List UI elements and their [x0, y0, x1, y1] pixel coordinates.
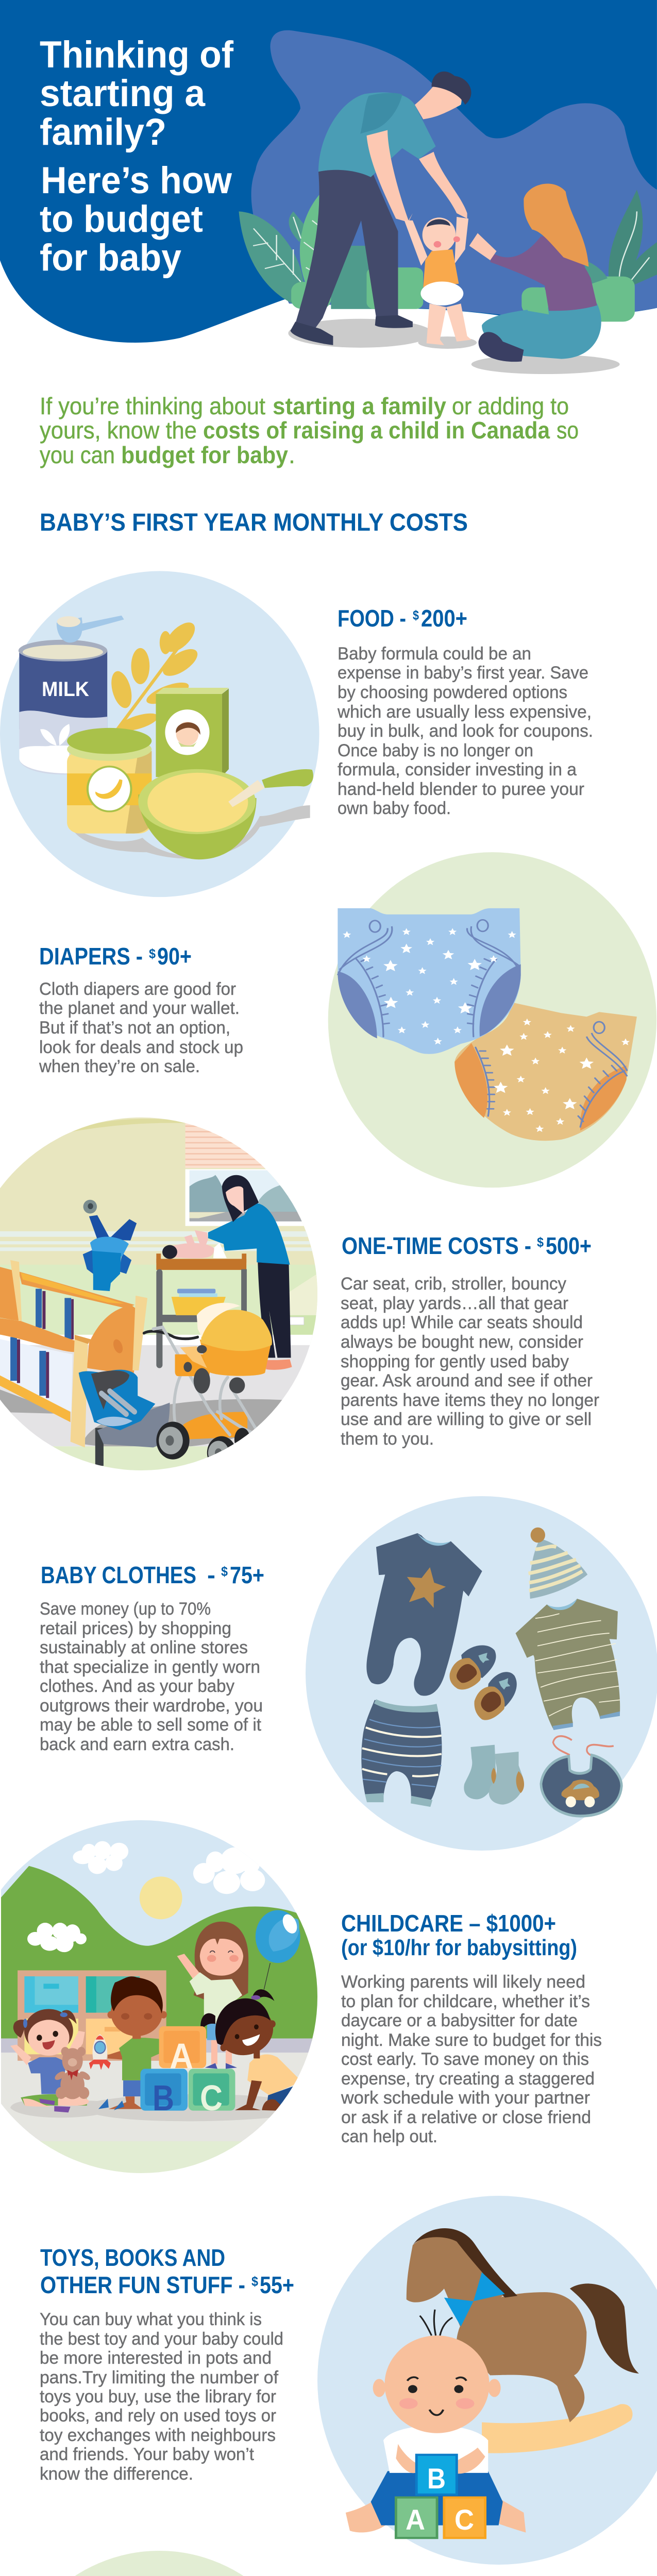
section heading: BABY’S FIRST YEAR MONTHLY COSTS — [40, 509, 468, 536]
blue header shape — [0, 0, 657, 343]
body: food — [337, 644, 593, 818]
intro text: starting a family — [273, 393, 446, 419]
body: one-time costs: them to you. — [341, 1429, 434, 1449]
body: baby clothes: retail prices) by shopping — [40, 1619, 231, 1638]
hero title: starting a — [40, 73, 206, 114]
panel: food illustration — [0, 571, 319, 897]
body: toys: and friends. Your baby won’t — [40, 2445, 255, 2464]
body: food: Once baby is no longer on — [338, 741, 533, 760]
block letters: baby: A — [406, 2503, 425, 2536]
body: one-time costs: Car seat, crib, stroller, bouncy — [341, 1274, 566, 1294]
block letters: baby — [406, 2462, 474, 2536]
window with blinds — [186, 1123, 304, 1226]
block letters: baby: C — [454, 2503, 474, 2536]
icon: milk can — [19, 616, 124, 774]
icon: hat — [529, 1528, 587, 1599]
body: toys: know the difference. — [40, 2464, 193, 2484]
right girl — [200, 1989, 298, 2111]
baby — [405, 217, 471, 345]
icon: socks — [464, 1745, 524, 1805]
icon: cereal box — [156, 688, 229, 777]
body: baby clothes: Save money (up to 70% — [40, 1599, 211, 1619]
body: toys: the best toy and your baby could — [40, 2329, 283, 2349]
body: food: buy in bulk, and look for coupons. — [338, 721, 593, 741]
hero header illustration — [0, 0, 657, 374]
body: toys: be more interested in pots and — [40, 2348, 272, 2368]
icon: baby food jar — [67, 728, 151, 834]
crib — [0, 1260, 147, 1448]
stroller — [142, 1302, 272, 1460]
panel: one-time costs illustration — [0, 1113, 331, 1481]
mother — [469, 183, 601, 362]
label: milk: MILK — [42, 678, 89, 701]
intro text: If you’re thinking about — [40, 393, 265, 419]
hero title: family? — [40, 111, 166, 153]
panel: baby clothes text — [40, 1562, 264, 1754]
body: baby clothes: that specialize in gently worn — [40, 1657, 260, 1677]
body: toys: books, and rely on used toys or — [40, 2406, 276, 2426]
body: baby clothes — [40, 1599, 263, 1754]
left girl — [10, 2009, 89, 2112]
body: food: which are usually less expensive, — [337, 702, 592, 722]
body: childcare: can help out. — [341, 2127, 437, 2146]
icon: blue diaper — [338, 908, 521, 1054]
panel: childcare text — [341, 1910, 602, 2146]
heading: diapers: $ — [149, 946, 156, 961]
body: one-time costs: parents have items they no longer — [341, 1391, 599, 1410]
tall girl — [177, 1922, 248, 2069]
icon: sun — [140, 1876, 182, 1919]
body: food: own baby food. — [338, 799, 451, 818]
body: childcare — [341, 1972, 602, 2146]
car seat — [79, 1370, 170, 1466]
body: childcare: Working parents will likely need — [341, 1972, 585, 1992]
icon: orange diaper — [454, 1002, 637, 1141]
body: childcare: expense, try creating a staggered — [341, 2069, 595, 2089]
panel: baby clothes illustration — [306, 1496, 657, 1851]
icon: onesie — [366, 1533, 482, 1696]
body: one-time costs: shopping for gently used baby — [341, 1352, 569, 1371]
heading: baby clothes: 75+ — [230, 1562, 264, 1588]
heading: food: 200+ — [421, 605, 467, 632]
intro text: or adding to — [452, 393, 569, 419]
panel: diapers text — [39, 943, 243, 1076]
body: one-time costs: seat, play yards…all that gear — [341, 1294, 568, 1313]
body: toys: You can buy what you think is — [40, 2310, 262, 2329]
heading: food: FOOD - — [338, 605, 406, 632]
room background — [0, 1113, 331, 1481]
body: one-time costs: adds up! While car seats should — [341, 1313, 583, 1332]
body: diapers — [39, 979, 243, 1076]
light blue blob — [251, 30, 657, 318]
body: toys: toys you buy, use the library for — [40, 2387, 276, 2406]
icon: bib — [541, 1736, 621, 1816]
body: one-time costs: gear. Ask around and see if other — [341, 1371, 593, 1391]
heading: diapers: DIAPERS - — [39, 943, 143, 970]
body: childcare: cost early. To save money on this — [341, 2049, 589, 2069]
body: childcare: to plan for childcare, whether it’s — [341, 1992, 590, 2011]
heading: one-time costs: 500+ — [546, 1232, 592, 1259]
woman — [208, 1175, 292, 1370]
body: diapers: look for deals and stock up — [39, 1038, 243, 1057]
baby on table — [162, 1230, 227, 1259]
body: baby clothes: may be able to sell some of it — [40, 1715, 262, 1735]
panel: one-time costs text — [341, 1232, 599, 1449]
intro text: you can — [40, 442, 115, 468]
icon: abc blocks — [140, 2026, 235, 2111]
intro text: budget for baby — [121, 442, 288, 468]
intro text: . — [289, 442, 295, 468]
panel: diapers illustration — [328, 852, 656, 1188]
body: baby clothes: back and earn extra cash. — [40, 1735, 234, 1754]
body: one-time costs — [341, 1274, 599, 1449]
body: childcare: daycare or a babysitter for date — [341, 2011, 578, 2030]
body: food: by choosing powdered options — [338, 683, 567, 702]
body: diapers: the planet and your wallet. — [39, 998, 240, 1018]
baby with blocks — [346, 2310, 526, 2538]
block letters — [153, 2036, 223, 2118]
icon: wheat — [108, 618, 203, 735]
body: food: formula, consider investing in a — [338, 760, 577, 779]
panel: childcare illustration — [0, 1814, 331, 2187]
body: diapers: But if that’s not an option, — [39, 1018, 230, 1038]
intro text: so — [557, 417, 579, 444]
body: baby clothes: clothes. And as your baby — [40, 1676, 234, 1696]
icon: rocket — [89, 2035, 111, 2070]
body: food: Baby formula could be an — [338, 644, 531, 664]
heading: food — [338, 605, 467, 632]
panel: life insurance illustration — [1, 2551, 317, 2576]
father — [290, 72, 471, 345]
heading: childcare: CHILDCARE – $1000+ — [341, 1910, 556, 1937]
subheading: babysitting: (or $10/hr for babysitting) — [341, 1935, 577, 1960]
panel: toys text — [40, 2244, 294, 2484]
body: diapers: when they’re on sale. — [39, 1057, 200, 1076]
heading: baby clothes: $ — [221, 1564, 228, 1579]
hero title: to budget — [40, 198, 203, 240]
heading: one-time costs: $ — [537, 1234, 544, 1250]
block letters: B — [153, 2078, 174, 2118]
icon: striped pants — [361, 1699, 442, 1807]
block letters: baby: B — [427, 2462, 446, 2495]
body: food: hand-held blender to puree your — [338, 779, 584, 799]
icon: striped romper — [515, 1599, 620, 1730]
block letters: C — [200, 2078, 223, 2118]
changing table — [156, 1253, 247, 1368]
icon: rocking horse — [407, 2228, 639, 2453]
panel: toys illustration — [317, 2196, 657, 2565]
body: diapers: Cloth diapers are good for — [39, 979, 236, 999]
hero title: for baby — [40, 237, 181, 279]
icon: bowl with spoon — [138, 769, 313, 859]
heading: toys: OTHER FUN STUFF - — [40, 2272, 245, 2298]
body: food: expense in baby’s first year. Save — [338, 663, 588, 683]
boy — [98, 1976, 167, 2110]
heading: baby clothes: BABY CLOTHES — [41, 1562, 196, 1588]
body: toys — [40, 2310, 283, 2484]
hero title: Here’s how — [41, 160, 232, 201]
shelf — [18, 1970, 166, 2061]
heading: food: $ — [413, 607, 419, 623]
body: childcare: work schedule with your partner — [341, 2088, 590, 2108]
body: toys: pans.Try limiting the number of — [40, 2368, 279, 2387]
heading: diapers: 90+ — [157, 943, 192, 970]
icon: balloon — [256, 1910, 300, 1989]
body: one-time costs: always be bought new, consider — [341, 1332, 583, 1352]
outlet — [289, 1317, 304, 1325]
icon: teddy bear — [54, 2047, 91, 2099]
heading: toys — [40, 2244, 294, 2298]
heading: one-time costs: ONE-TIME COSTS - — [342, 1232, 531, 1259]
heading: baby clothes: - — [207, 1562, 215, 1588]
body: one-time costs: use and are willing to give or sell — [341, 1410, 592, 1429]
body: childcare: night. Make sure to budget for this — [341, 2030, 602, 2050]
body: toys: toy exchanges with neighbours — [40, 2426, 276, 2445]
clouds — [27, 1841, 265, 1952]
body: baby clothes: sustainably at online stores — [40, 1638, 248, 1657]
scene background — [0, 1814, 331, 2187]
panel: food text — [337, 605, 593, 818]
body: baby clothes: outgrows their wardrobe, you — [40, 1696, 263, 1716]
block letters: A — [170, 2036, 193, 2076]
body: childcare: or ask if a relative or close friend — [341, 2108, 591, 2127]
plants — [239, 190, 657, 321]
hero title — [40, 34, 234, 279]
intro text: costs of raising a child in Canada — [203, 417, 550, 444]
icon: slippers — [449, 1645, 517, 1720]
heading: toys: 55+ — [260, 2272, 294, 2298]
baby carrier — [83, 1200, 137, 1291]
heading: toys: TOYS, BOOKS AND — [40, 2244, 225, 2271]
hero title: Thinking of — [40, 34, 234, 76]
heading: toys: $ — [251, 2274, 258, 2289]
intro text — [40, 393, 579, 468]
intro text: yours, know the — [40, 417, 197, 444]
figure shadows — [288, 319, 620, 374]
